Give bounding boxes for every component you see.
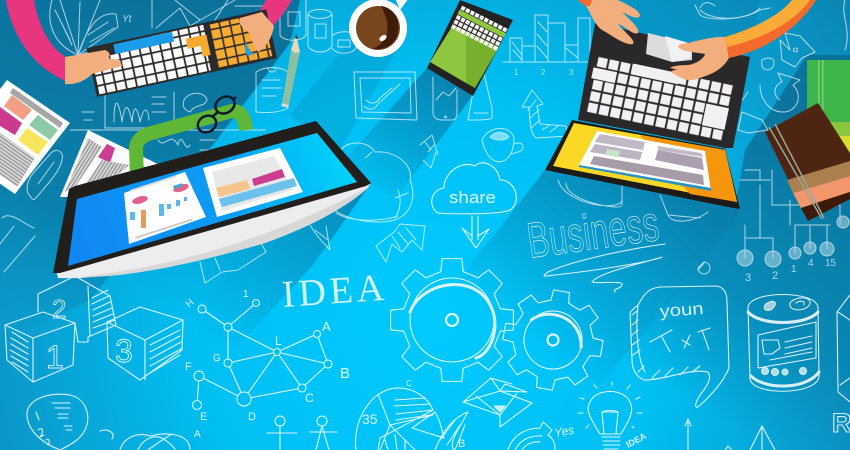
screen card: report (203, 148, 303, 217)
doodle: pie fan: Yt (122, 14, 133, 25)
keyboard body (86, 9, 277, 97)
tablet white base (55, 184, 371, 278)
doodle: mug (482, 128, 523, 162)
block 3: 3 (115, 333, 133, 369)
doodle: light bulb (578, 382, 648, 450)
device: phone (427, 0, 513, 96)
network labels: F (185, 361, 192, 373)
doodle: left pen (0, 216, 35, 272)
doodle: yes target (508, 422, 575, 450)
orange corner key (186, 34, 211, 59)
network labels: 1 (243, 289, 249, 300)
heading: IDEA: IDEA (281, 267, 386, 316)
doodle: small arrows at center (420, 135, 438, 168)
sleeve: orange right arm (725, 0, 816, 58)
doodle: top bar chart: 3 (569, 68, 574, 77)
white keys (92, 35, 211, 94)
doodle: pie fan (50, 0, 133, 55)
doodle: pie chart: C (406, 379, 412, 388)
block 1: 1 (46, 339, 64, 375)
orange keypad (209, 13, 272, 68)
doodle: blocks 1 2 3 (5, 276, 183, 382)
doodle: tree chart: 4 (808, 258, 814, 269)
device: laptop (545, 23, 750, 209)
network labels: G (213, 353, 221, 364)
doodle: line graph (152, 0, 262, 28)
hand: left on keyboard (65, 50, 122, 84)
doodle: Business lettering: Business (524, 195, 662, 269)
icon: glasses (195, 93, 238, 136)
network labels: E (200, 411, 207, 423)
network labels: A (322, 319, 331, 334)
doodle: light bulb: IDEA (624, 431, 648, 450)
laptop screen lid (545, 120, 740, 209)
doodle: network graph (184, 289, 350, 440)
doodle: bottom right arrow and triangle (685, 419, 775, 450)
doodle: pie chart: B (458, 438, 465, 450)
book: brown notebook (765, 103, 850, 221)
paper: second report (60, 130, 160, 197)
doodle: people figures (267, 416, 337, 450)
doodle: paper clip (27, 150, 62, 199)
device: external keyboard (86, 9, 277, 97)
arm: pink sleeve left (6, 0, 292, 81)
doodle: tree chart: 1 (791, 264, 797, 275)
doodle: phones (433, 74, 492, 120)
doodle: striped arrow (376, 224, 425, 262)
doodle: top bar chart (503, 15, 590, 77)
doodle: open box (463, 378, 532, 427)
hand: right on keyboard (239, 12, 274, 52)
doodle: pie chart (355, 379, 468, 450)
gear left (391, 259, 513, 381)
laptop base (578, 23, 750, 148)
doodle: share cloud: share (449, 188, 496, 207)
doodles: top row sketches (0, 0, 849, 284)
tablet bezel (53, 121, 371, 273)
doodle: cans (280, 0, 356, 53)
phone keypad (450, 5, 508, 52)
device: tablet (53, 121, 371, 278)
tablet screen (68, 133, 357, 266)
network labels: A (194, 429, 201, 440)
doodle: right symbols (700, 0, 847, 133)
doodle: tree chart: 15 (825, 258, 837, 269)
doodle: notepad (256, 68, 288, 113)
icon: green handle (136, 111, 246, 178)
doodle: can (748, 294, 819, 391)
doodle: top bar chart: 1 (514, 68, 519, 77)
block 1 (5, 312, 75, 382)
doodle: share cloud (432, 163, 516, 248)
network labels: D (248, 411, 256, 423)
network labels: H (184, 297, 196, 310)
block 2: 2 (52, 294, 66, 324)
doodle: gears (391, 259, 610, 397)
network labels (184, 289, 350, 440)
screen card: charts (124, 172, 206, 244)
doodle: tree chart: 3 (745, 272, 751, 284)
phone green screen (430, 25, 466, 83)
doodle: your TXT speech bubble: youn (659, 299, 704, 321)
icon: pencil (281, 34, 300, 108)
block 3 (107, 307, 183, 380)
block 2 (38, 276, 116, 342)
gear right (496, 283, 610, 397)
doodle: bent arrow (522, 90, 568, 138)
doodle: pie chart: 35 (362, 411, 378, 427)
doodle: tree chart (737, 170, 849, 284)
doodle: tablet with check mark (354, 72, 417, 120)
doodle: top bar chart: 2 (541, 68, 546, 77)
doodle: yes target: Yes (553, 423, 575, 440)
doodle: top curved ribbon (660, 5, 760, 221)
book: green notebook (807, 60, 850, 155)
network labels: B (340, 365, 350, 382)
sleeve: orange left cuff (578, 0, 592, 6)
laptop keys (584, 56, 734, 142)
blue bar (113, 32, 174, 54)
network labels: C (305, 391, 314, 405)
doodle: laptop shadow sketch (558, 176, 622, 207)
doodle: Business lettering (524, 195, 665, 292)
trackpad (646, 33, 692, 62)
doodle: small drop (698, 262, 710, 274)
paper: left report (0, 80, 70, 194)
doodle: bar chart middle (105, 92, 207, 130)
doodle: your TXT speech bubble (630, 286, 729, 407)
hand: left on laptop (578, 0, 640, 44)
network labels: L (275, 334, 282, 348)
icon: coffee cup (349, 0, 409, 57)
screen document (579, 131, 711, 191)
tiny cursor on keypad (245, 42, 254, 56)
doodle: list speech bubble and orbit (27, 394, 190, 450)
doodle: tree chart: 2 (772, 270, 778, 282)
hand: right on laptop (670, 37, 729, 80)
doodle: big cloud (332, 143, 413, 222)
doodle: pointed ribbon (200, 225, 330, 283)
doodle: horizontal axes (70, 112, 265, 150)
doodle: right edge pencil and letter (832, 295, 850, 438)
